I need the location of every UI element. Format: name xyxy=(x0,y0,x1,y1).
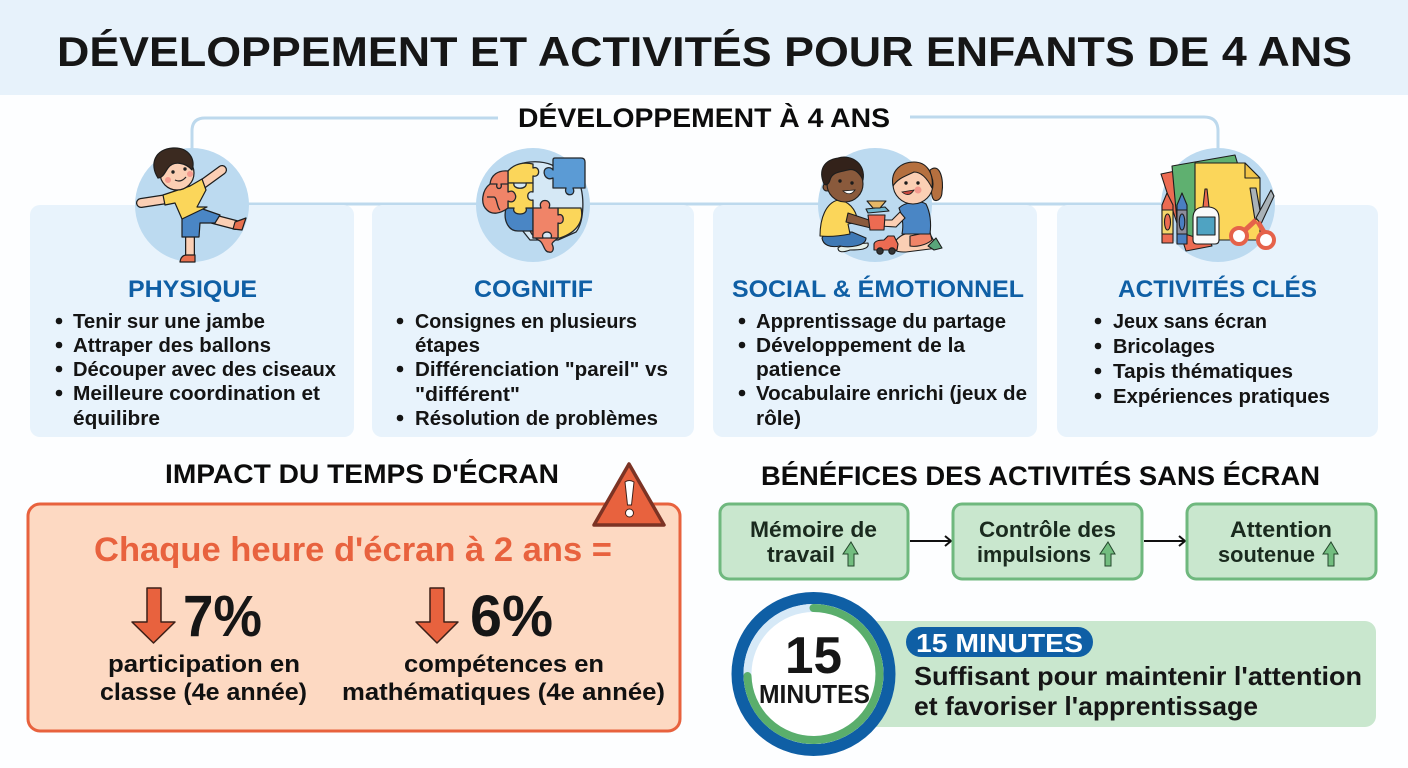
list: social et émotionnel: Développement de la xyxy=(756,335,966,357)
arrow: mémoire to contrôle xyxy=(910,536,951,546)
stat: 7 pour cent participation: classe (4e année) xyxy=(100,679,307,706)
list: activités clés: Jeux sans écran xyxy=(1113,311,1267,333)
list: cognitif: étapes xyxy=(415,335,480,357)
heading: cognitif: COGNITIF xyxy=(474,276,593,303)
stat: 7 pour cent participation: 7% xyxy=(183,584,262,649)
stat: 6 pour cent mathématiques: 6% xyxy=(470,584,553,649)
list: cognitif: "différent" xyxy=(415,384,520,406)
stat: 7 pour cent participation xyxy=(100,584,307,706)
icon: craft supplies xyxy=(1161,148,1275,262)
panel: cognitif xyxy=(372,148,694,437)
box: attention soutenue: Attention xyxy=(1230,517,1332,542)
icon: child balancing on one leg xyxy=(135,148,249,262)
list: physique xyxy=(56,311,336,430)
icon: puzzle brain xyxy=(476,148,590,262)
panel: social et émotionnel xyxy=(713,148,1037,437)
list: cognitif: Différenciation "pareil" vs xyxy=(415,359,668,381)
icon: down arrow xyxy=(416,588,458,643)
list: social et émotionnel: Vocabulaire enrichi (jeux de xyxy=(756,383,1027,405)
list: activités clés xyxy=(1095,311,1330,408)
box: mémoire de travail: travail xyxy=(767,542,835,567)
connector lines xyxy=(192,117,1218,204)
panel: activités clés xyxy=(1057,148,1378,437)
stat: 7 pour cent participation: participation en xyxy=(108,651,300,678)
text: suffisant: et favoriser l'apprentissage xyxy=(914,691,1258,721)
box: contrôle des impulsions: impulsions xyxy=(977,542,1091,567)
stat: 6 pour cent mathématiques: compétences en xyxy=(404,651,604,678)
box: mémoire de travail xyxy=(720,504,908,579)
icon: up arrow xyxy=(843,542,858,566)
box: contrôle des impulsions xyxy=(953,504,1142,579)
icon: down arrow xyxy=(132,588,175,643)
list: social et émotionnel: patience xyxy=(756,359,841,381)
list: physique: Tenir sur une jambe xyxy=(73,311,265,333)
list: cognitif xyxy=(397,311,668,430)
list: cognitif: Consignes en plusieurs xyxy=(415,311,637,333)
icon: warning triangle xyxy=(594,464,664,525)
panel: impact xyxy=(28,464,680,731)
title band xyxy=(0,0,1408,95)
list: activités clés: Tapis thématiques xyxy=(1113,361,1293,383)
pill: 15 minutes: 15 MINUTES xyxy=(916,628,1083,658)
list: physique: Attraper des ballons xyxy=(73,335,271,357)
heading: social et émotionnel: SOCIAL & ÉMOTIONNEL xyxy=(732,275,1024,303)
box: mémoire de travail: Mémoire de xyxy=(750,517,877,542)
box: attention soutenue xyxy=(1187,504,1376,579)
list: activités clés: Expériences pratiques xyxy=(1113,386,1330,408)
list: activités clés: Bricolages xyxy=(1113,336,1215,358)
list: social et émotionnel xyxy=(739,311,1027,430)
list: cognitif: Résolution de problèmes xyxy=(415,408,658,430)
arrow: contrôle to attention xyxy=(1144,536,1185,546)
heading: physique: PHYSIQUE xyxy=(128,276,257,303)
icon: up arrow xyxy=(1323,542,1338,566)
timer ring: 15 minutes: MINUTES xyxy=(759,679,870,709)
title band: DÉVELOPPEMENT ET ACTIVITÉS POUR ENFANTS DE 4 ANS xyxy=(57,28,1352,75)
headline: chaque heure d'écran: Chaque heure d'écran à 2 ans = xyxy=(94,531,612,569)
panel: physique xyxy=(30,148,354,437)
box: attention soutenue: soutenue xyxy=(1218,542,1315,567)
timer ring: 15 minutes xyxy=(738,598,890,750)
list: physique: équilibre xyxy=(73,408,160,430)
section heading: développement: DÉVELOPPEMENT À 4 ANS xyxy=(518,102,890,133)
callout: 15 minutes banner xyxy=(860,621,1376,727)
icon: two children sharing toys xyxy=(818,148,942,262)
section heading: bénéfices: BÉNÉFICES DES ACTIVITÉS SANS ÉCRAN xyxy=(761,460,1320,491)
text: suffisant: Suffisant pour maintenir l'attention xyxy=(914,661,1362,691)
list: physique: Découper avec des ciseaux xyxy=(73,359,336,381)
text: suffisant xyxy=(914,661,1362,721)
list: social et émotionnel: Apprentissage du partage xyxy=(756,311,1006,333)
list: physique: Meilleure coordination et xyxy=(73,383,320,405)
section heading: impact du temps d'écran: IMPACT DU TEMPS D'ÉCRAN xyxy=(165,458,559,489)
timer ring: 15 minutes: 15 xyxy=(785,627,842,685)
heading: activités clés: ACTIVITÉS CLÉS xyxy=(1118,275,1317,303)
list: social et émotionnel: rôle) xyxy=(756,408,801,430)
box: contrôle des impulsions: Contrôle des xyxy=(979,517,1116,542)
stat: 6 pour cent mathématiques: mathématiques (4e année) xyxy=(342,679,665,706)
icon: up arrow xyxy=(1100,542,1115,566)
stat: 6 pour cent mathématiques xyxy=(342,584,665,706)
